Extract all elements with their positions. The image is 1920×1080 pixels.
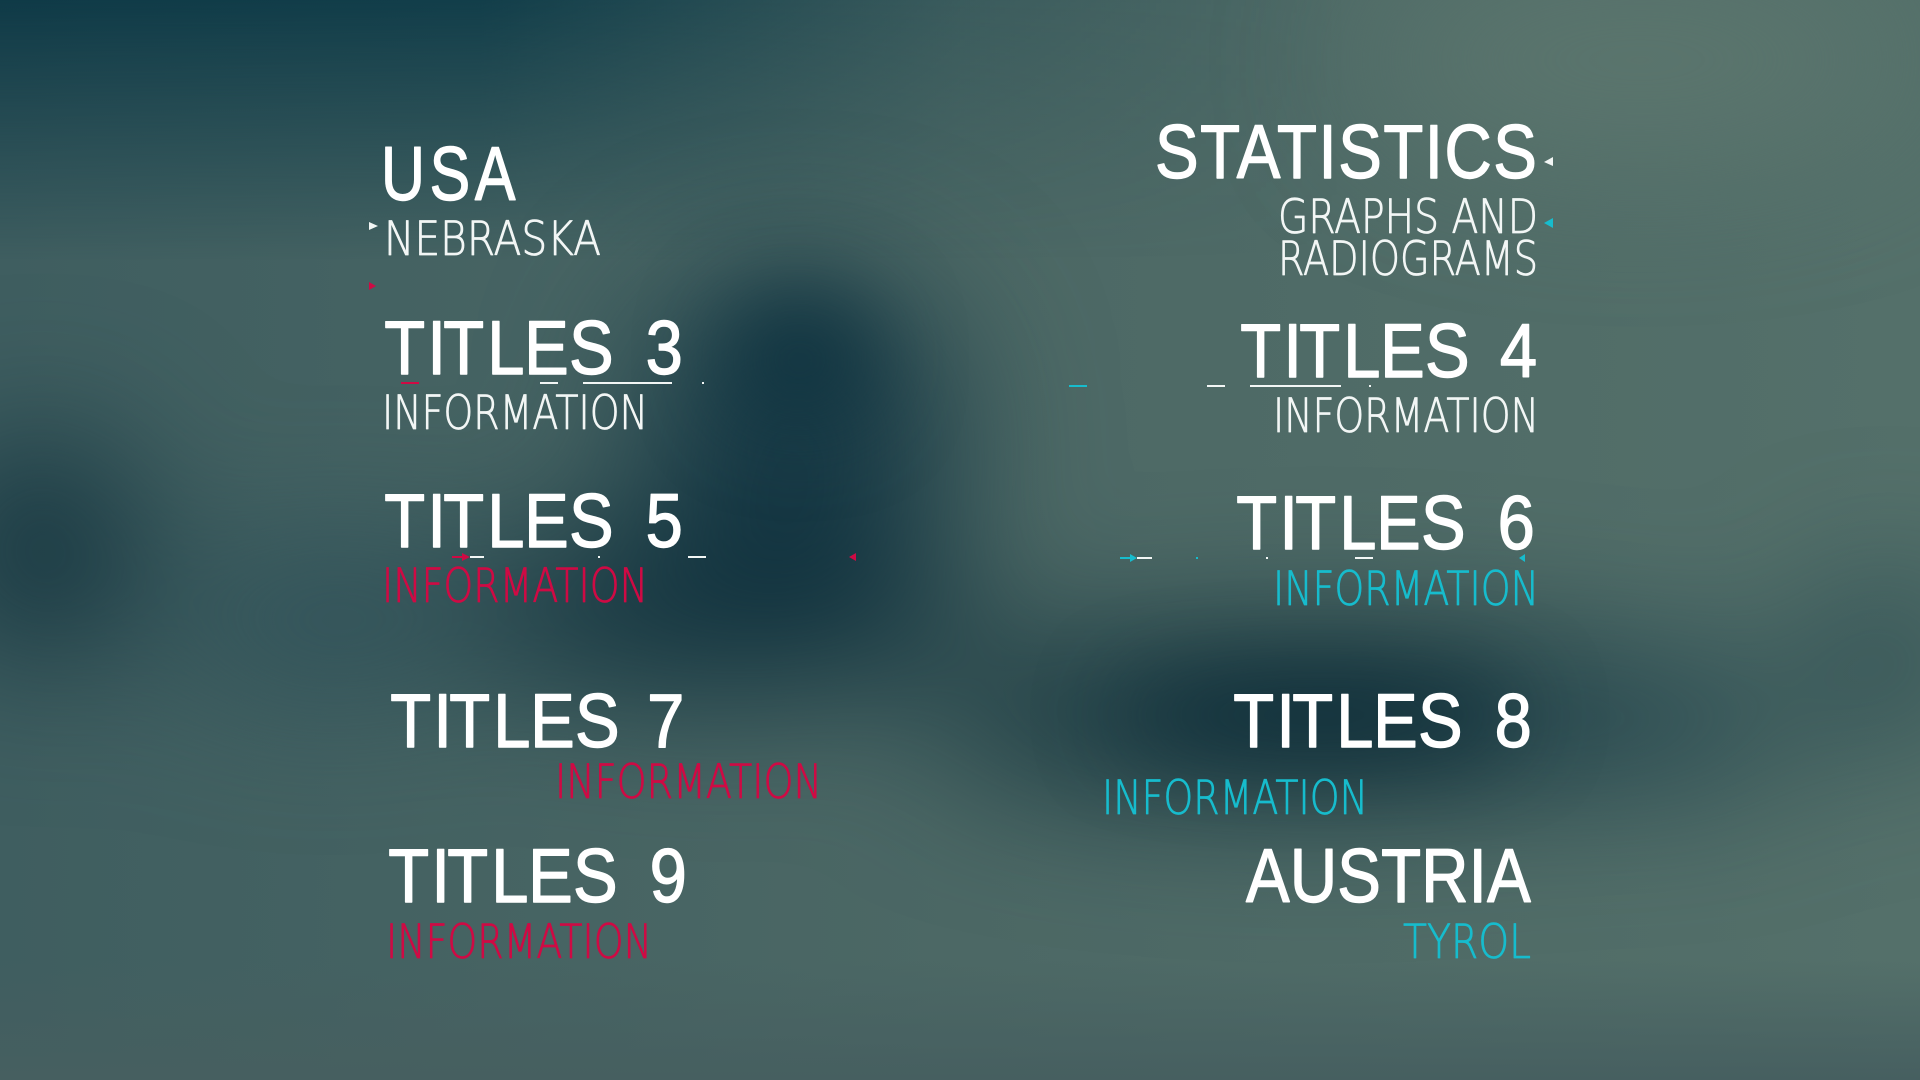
block: Austria Tyrol: [1246, 834, 1531, 970]
glitch line marks: [1120, 554, 1525, 562]
block: Titles 4: [1069, 309, 1539, 444]
subheading: Information: INFORMATION: [1273, 389, 1539, 444]
heading: USA: USA: [381, 132, 515, 217]
subheading: Information cyan: INFORMATION: [1273, 562, 1539, 617]
block: USA Nebraska: [369, 132, 601, 290]
glitch line marks: [401, 382, 704, 384]
heading: Titles 4: TITLES 4: [1240, 309, 1537, 394]
heading: Titles 8: TITLES 8: [1233, 679, 1532, 764]
heading: Titles 7: TITLES 7: [390, 679, 684, 764]
block: Statistics: [1155, 110, 1553, 287]
block: Titles 5: [382, 479, 856, 614]
block: Titles 9: [386, 834, 687, 970]
glitch line marks: [452, 553, 856, 561]
heading: Titles 3: TITLES 3: [384, 306, 683, 391]
icon: white triangle marker: [369, 222, 378, 230]
subheading: Information red: INFORMATION: [555, 755, 822, 810]
subheading line two: RADIOGRAMS: [1278, 232, 1538, 287]
subheading: Information cyan: INFORMATION: [1102, 771, 1368, 826]
block: Titles 6: [1120, 481, 1539, 617]
block: Titles 8: [1102, 679, 1532, 826]
glitch line marks: [1069, 385, 1371, 387]
block: Titles 7: [390, 679, 822, 810]
heading: Austria: AUSTRIA: [1246, 834, 1531, 919]
subheading: Information: INFORMATION: [382, 386, 648, 441]
block: Titles 3: [382, 306, 704, 441]
heading: Statistics: STATISTICS: [1155, 110, 1537, 195]
heading: Titles 5: TITLES 5: [384, 479, 683, 564]
subheading: Tyrol: TYROL: [1403, 915, 1531, 970]
icon: red triangle marker: [369, 282, 376, 290]
subheading: Nebraska: NEBRASKA: [384, 212, 601, 267]
heading: Titles 6: TITLES 6: [1236, 481, 1535, 566]
icon: white triangle marker: [1544, 157, 1553, 166]
subheading: Graphs and radiograms: GRAPHS AND: [1278, 190, 1538, 245]
subheading: Information red: INFORMATION: [382, 559, 648, 614]
subheading: Information red: INFORMATION: [386, 915, 652, 970]
icon: cyan triangle marker: [1544, 218, 1553, 228]
heading: Titles 9: TITLES 9: [388, 834, 687, 919]
